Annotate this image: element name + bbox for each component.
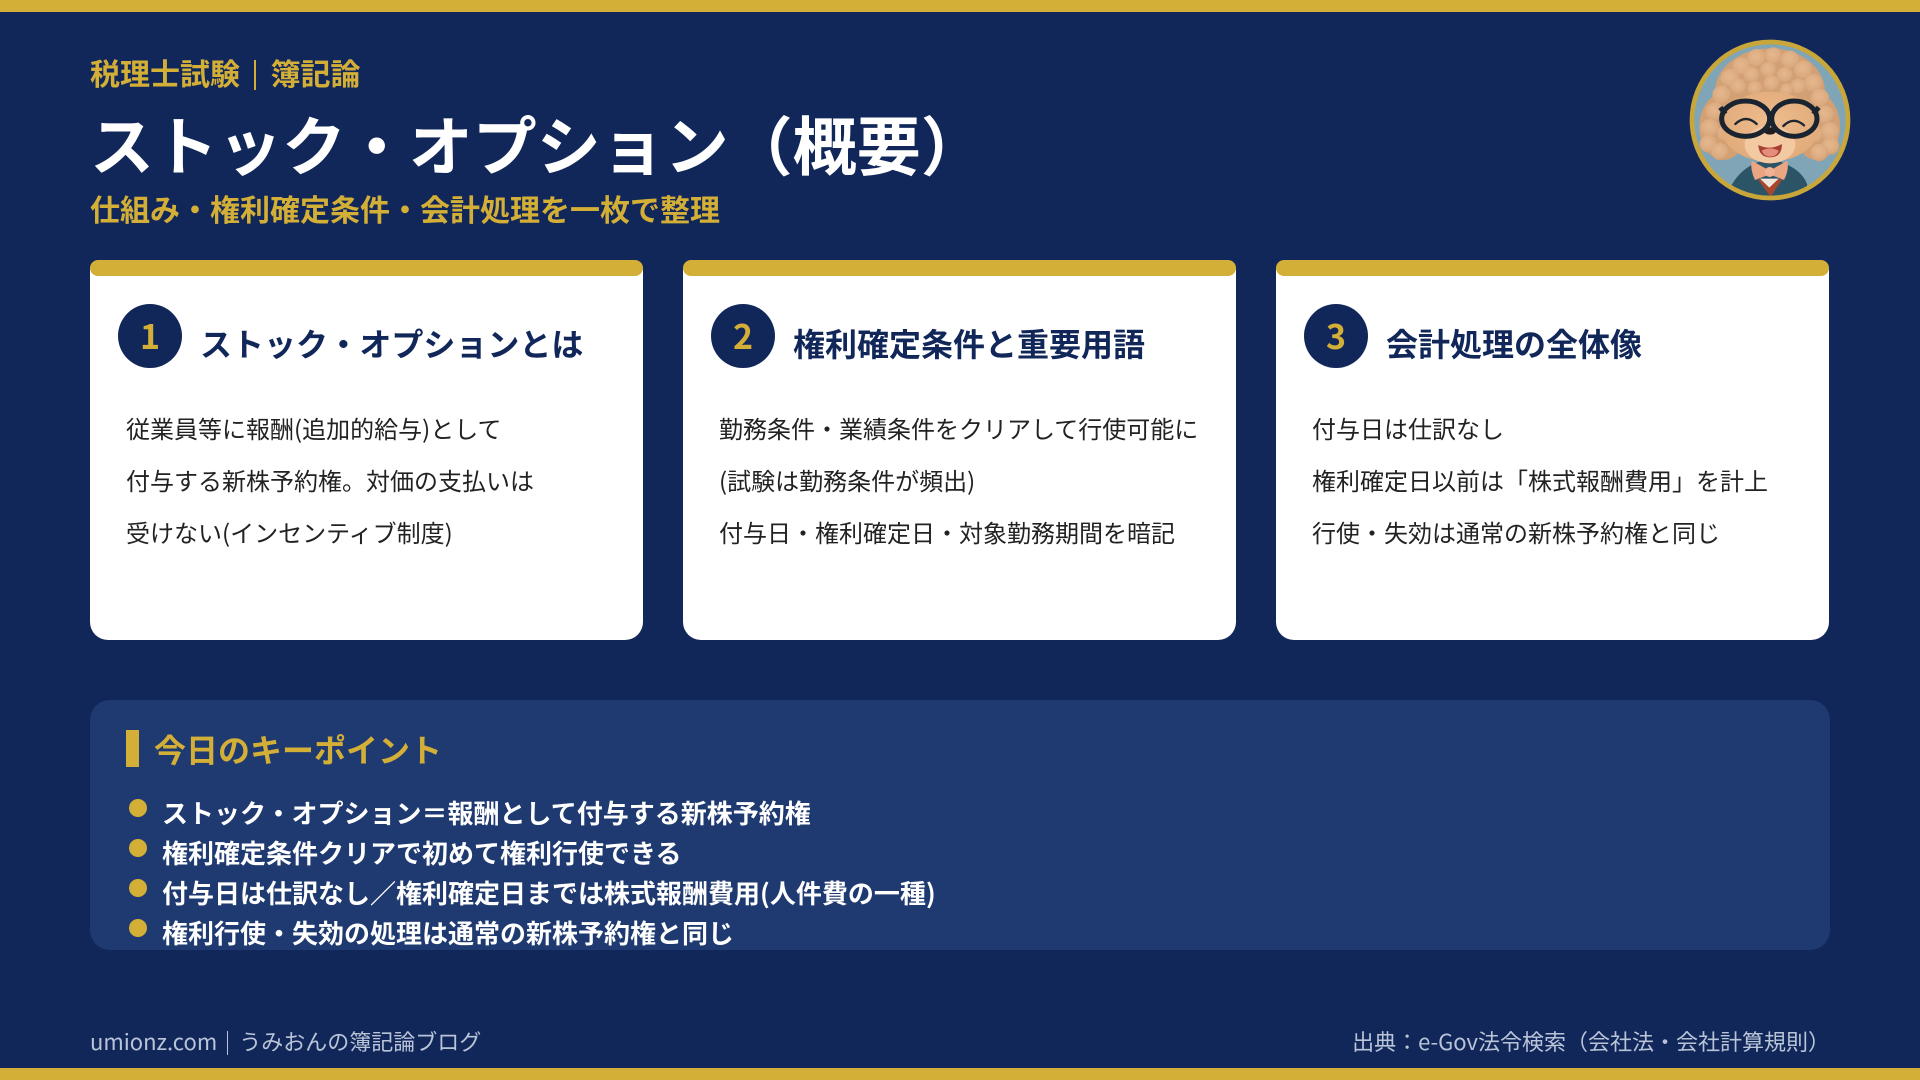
card text	[1312, 410, 1768, 549]
icon: poodle avatar with glasses	[1690, 40, 1850, 200]
bullet dot 3	[129, 879, 147, 897]
top accent bar	[0, 0, 1920, 12]
number badge 3	[1304, 304, 1368, 368]
heading marker	[126, 730, 139, 767]
key point 4: 権利行使・失効の処理は通常の新株予約権と同じ	[162, 914, 734, 951]
card top gold bar	[90, 260, 643, 276]
key point 2: 権利確定条件クリアで初めて権利行使できる	[162, 834, 681, 871]
card text: 付与日・権利確定日・対象勤務期間を暗記	[719, 514, 1175, 549]
number badge 2	[711, 304, 775, 368]
bullet dot 4	[129, 919, 147, 937]
card text: 付与日は仕訳なし	[1312, 410, 1504, 445]
card heading: 権利確定条件と重要用語	[793, 320, 1145, 366]
bullet dot 2	[129, 839, 147, 857]
bottom accent bar	[0, 1068, 1920, 1080]
key points heading: 今日のキーポイント	[154, 726, 442, 772]
title: ストック・オプション（概要）	[90, 97, 985, 189]
footer right: source: 出典：e-Gov法令検索（会社法・会社計算規則）	[1352, 1025, 1830, 1057]
eyebrow: exam and subject: 税理士試験 簿記論	[90, 50, 360, 94]
number badge 1	[118, 304, 182, 368]
key point 3: 付与日は仕訳なし／権利確定日までは株式報酬費用(人件費の一種)	[162, 874, 936, 911]
number badge 3: 3	[1326, 310, 1346, 359]
card text: 付与する新株予約権。対価の支払いは	[126, 462, 534, 497]
card text	[126, 410, 534, 549]
footer left: blog name: umionz.com うみおんの簿記論ブログ	[90, 1025, 481, 1057]
card text: 行使・失効は通常の新株予約権と同じ	[1312, 514, 1720, 549]
number badge 1: 1	[140, 310, 160, 359]
card text	[719, 410, 1198, 549]
card top gold bar	[683, 260, 1236, 276]
subtitle: 仕組み・権利確定条件・会計処理を一枚で整理	[90, 186, 720, 230]
card background	[1276, 268, 1829, 640]
card text: 権利確定日以前は「株式報酬費用」を計上	[1312, 462, 1768, 497]
panel: today's key points	[90, 700, 1830, 950]
panel: accounting overview	[1276, 260, 1829, 640]
card text: 受けない(インセンティブ制度)	[126, 514, 453, 549]
card text: (試験は勤務条件が頻出)	[719, 462, 975, 497]
number badge 2: 2	[733, 310, 753, 359]
card background	[683, 268, 1236, 640]
card text: 勤務条件・業績条件をクリアして行使可能に	[719, 410, 1198, 445]
card heading: 会計処理の全体像	[1386, 320, 1642, 366]
card heading: ストック・オプションとは	[200, 320, 583, 366]
card background	[90, 268, 643, 640]
bullet dot 1	[129, 799, 147, 817]
key point 1: ストック・オプション＝報酬として付与する新株予約権	[162, 794, 811, 831]
panel: vesting conditions and key terms	[683, 260, 1236, 640]
card text: 従業員等に報酬(追加的給与)として	[126, 410, 502, 445]
panel: what is a stock option	[90, 260, 643, 640]
card top gold bar	[1276, 260, 1829, 276]
